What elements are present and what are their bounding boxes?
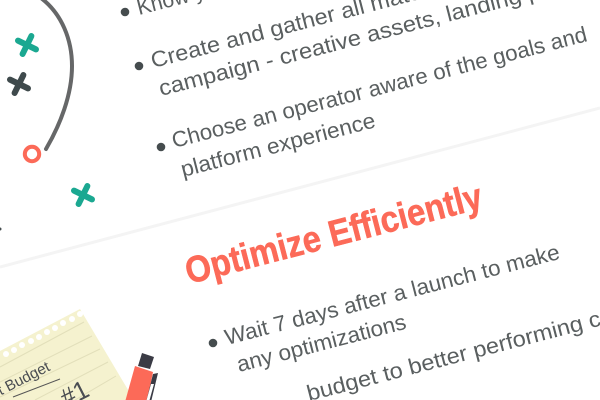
icon: dark cross xyxy=(6,71,32,97)
icon: teal cross top xyxy=(14,32,40,58)
bullet list: preparation: platform experience xyxy=(178,108,378,182)
bullet list: optimize xyxy=(209,239,600,400)
curved arc line xyxy=(41,0,72,149)
icon: pen xyxy=(125,353,158,400)
heading: Optimize Efficiently: Optimize Efficiently xyxy=(181,176,487,292)
icon: coral ring xyxy=(25,147,39,161)
bullet list: preparation xyxy=(121,0,593,182)
icon: teal cross bottom xyxy=(70,182,96,208)
notepaper: first budget xyxy=(0,309,140,400)
bullet list: optimize: Wait 7 days after a launch to make xyxy=(222,239,562,350)
paper edge dot xyxy=(0,228,2,230)
bullet list: optimize: any optimizations xyxy=(234,309,409,377)
bullet list: preparation: Choose an operator aware of the goals and xyxy=(169,21,590,153)
